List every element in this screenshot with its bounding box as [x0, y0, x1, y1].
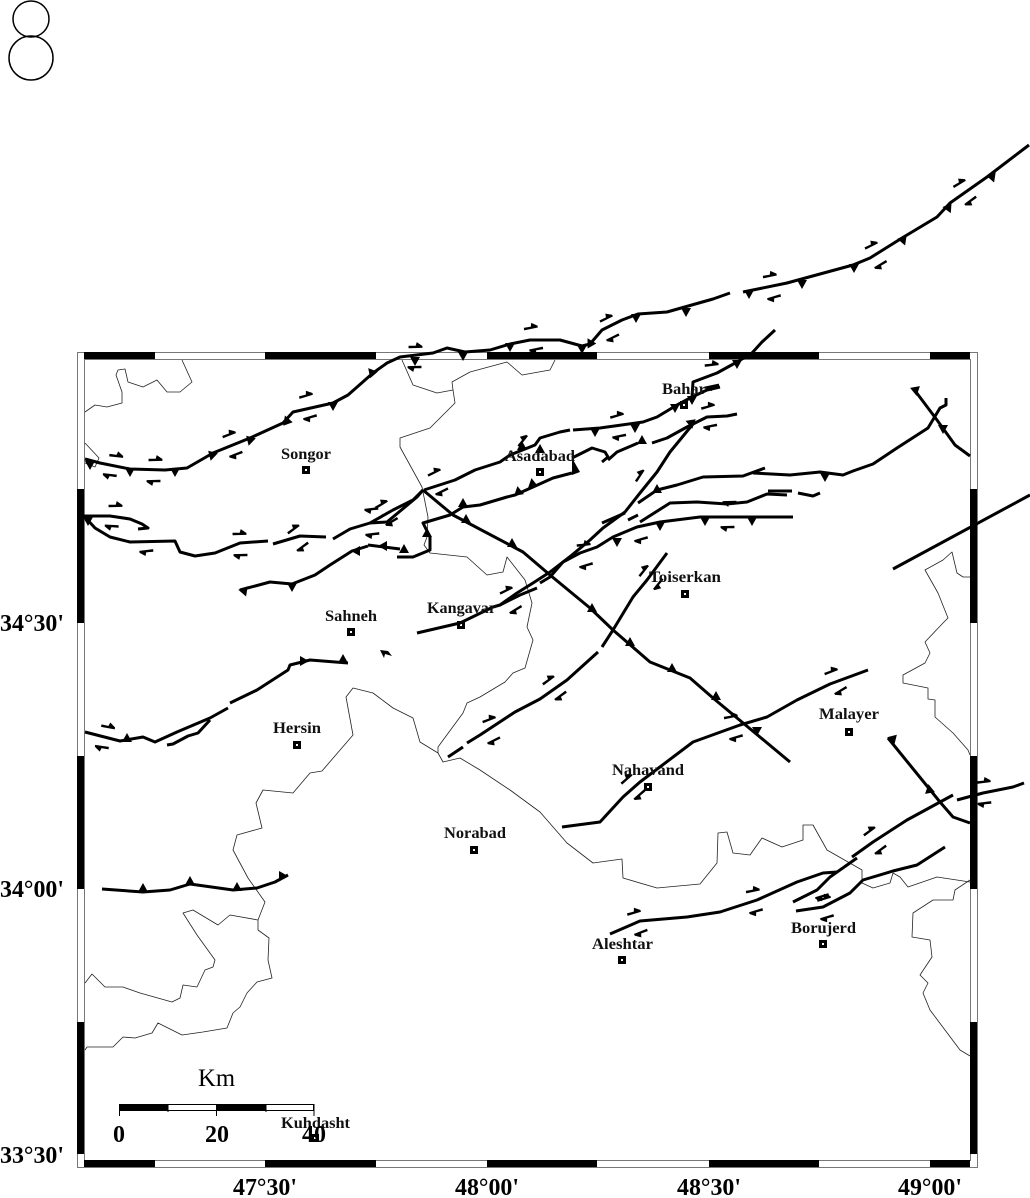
scale bar: 40	[302, 1122, 326, 1148]
icon: stacked circles	[9, 1, 53, 80]
map frame with graduated border	[77, 352, 978, 1168]
latitude labels: 34°30'	[0, 611, 64, 637]
scale bar	[113, 1065, 326, 1148]
province boundaries	[85, 360, 970, 1056]
scale bar: 0	[113, 1122, 125, 1148]
city labels: Malayer	[819, 706, 879, 723]
city labels: Norabad	[444, 825, 506, 842]
city labels: Kuhdasht	[281, 1115, 351, 1132]
latitude labels: 34°00'	[0, 877, 64, 903]
city labels: Toiserkan	[649, 569, 721, 586]
thrust fault teeth	[83, 172, 999, 892]
longitude labels	[233, 1175, 962, 1198]
city labels: Hersin	[273, 720, 321, 737]
city labels: Bahar	[662, 381, 706, 398]
city labels: Sahneh	[325, 608, 377, 625]
scale bar: Km	[198, 1065, 236, 1092]
latitude labels: 33°30'	[0, 1143, 64, 1169]
city labels: Nahavand	[612, 762, 684, 779]
latitude labels	[0, 611, 64, 1169]
city markers	[293, 401, 853, 1142]
city labels: Aleshtar	[592, 936, 653, 953]
fault lines	[84, 145, 1030, 934]
scale bar: 20	[205, 1122, 229, 1148]
city labels	[273, 381, 879, 1132]
city labels: Songor	[281, 446, 331, 463]
city labels: Borujerd	[791, 920, 856, 937]
city labels: Asadabad	[505, 448, 575, 465]
strike-slip half arrows	[95, 177, 991, 938]
city labels: Kangavar	[427, 600, 496, 617]
